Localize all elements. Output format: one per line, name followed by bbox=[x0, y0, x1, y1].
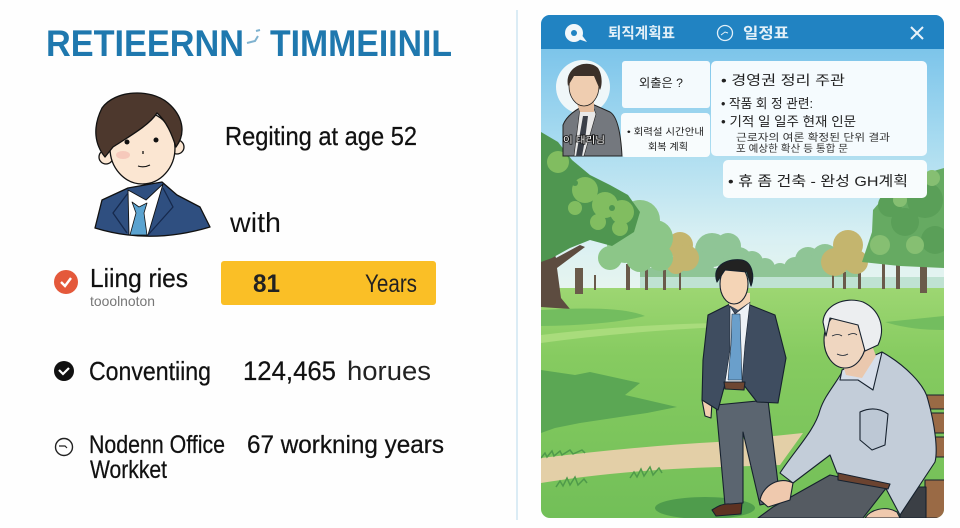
bar: years highlight: 81 bbox=[253, 270, 280, 298]
chat box: note bbox=[621, 113, 710, 157]
illustration: sand path bbox=[541, 433, 803, 483]
title bbox=[46, 23, 452, 64]
row: commuting hours bbox=[54, 356, 431, 386]
icon: close bbox=[911, 27, 923, 39]
illustration: wooden bench bbox=[925, 395, 945, 518]
row: living years bbox=[54, 261, 436, 309]
icon: black check bbox=[54, 361, 74, 381]
bar: years highlight: Years bbox=[365, 270, 417, 298]
text: with: with bbox=[229, 207, 281, 238]
row: office worker years bbox=[56, 431, 444, 484]
chat box: bullet list: 근로자의 여론 확정된 단위 결과 bbox=[736, 131, 890, 144]
row: commuting hours: horues bbox=[347, 356, 431, 386]
illustration: tree shadows on grass bbox=[541, 308, 944, 433]
row: office worker years: 67 workning years bbox=[247, 431, 444, 459]
chat box: bullet list: • 기적 일 일주 현재 인문 bbox=[721, 114, 856, 129]
chat box: note: • 회력설 시간안내 bbox=[627, 126, 704, 138]
chat box: bullet list: 포 예상한 확산 등 통합 문 bbox=[736, 143, 848, 155]
icon: chat bubble bbox=[565, 24, 587, 42]
icon: small portrait of manager: 이 대리님 bbox=[563, 135, 605, 145]
header bar bbox=[541, 15, 944, 49]
icon: clock bbox=[56, 438, 72, 456]
illustration: elderly man on bench bbox=[758, 300, 945, 518]
icon: young office worker avatar bbox=[95, 93, 210, 236]
illustration: grass bbox=[541, 288, 944, 518]
bar: years highlight bbox=[221, 261, 436, 305]
row: living years: tooolnoton bbox=[90, 293, 155, 309]
illustration: trees bbox=[541, 132, 949, 309]
header bar: 퇴직계획표 bbox=[608, 25, 675, 42]
chat box: bullet list bbox=[711, 61, 927, 156]
row: commuting hours: 124,465 bbox=[243, 356, 336, 386]
chat box: note: 회복 계획 bbox=[648, 141, 688, 153]
icon: small portrait of manager bbox=[556, 60, 622, 156]
row: living years: Liing ries bbox=[90, 263, 188, 293]
chat box: greeting: 외출은 ? bbox=[639, 76, 683, 90]
chat box: summary bbox=[723, 160, 927, 198]
row: office worker years: Nodenn Office bbox=[89, 431, 225, 459]
row: office worker years: Workket bbox=[90, 456, 167, 484]
chat box: greeting bbox=[622, 61, 710, 108]
icon: red check bbox=[54, 270, 78, 294]
row: commuting hours: Conventiing bbox=[89, 356, 211, 386]
illustration: standing man in suit bbox=[702, 260, 786, 516]
text: retiring at age: Regiting at age 52 bbox=[225, 121, 417, 151]
chat box: bullet list: • 경영권 정리 주관 bbox=[721, 73, 845, 88]
illustration: far tree line bbox=[640, 233, 944, 289]
title: RETIEERNN bbox=[46, 23, 244, 64]
chat box: summary: • 휴 좀 건축 - 완성 GH계획 bbox=[728, 173, 908, 189]
title: TIMMEIINIL bbox=[270, 23, 452, 64]
chat box: bullet list: • 작품 회 정 관련: bbox=[721, 96, 813, 111]
panel: park scene with chat overlay bbox=[541, 15, 949, 519]
icon: clock circle bbox=[718, 26, 732, 40]
header bar: 일정표 bbox=[743, 25, 789, 42]
